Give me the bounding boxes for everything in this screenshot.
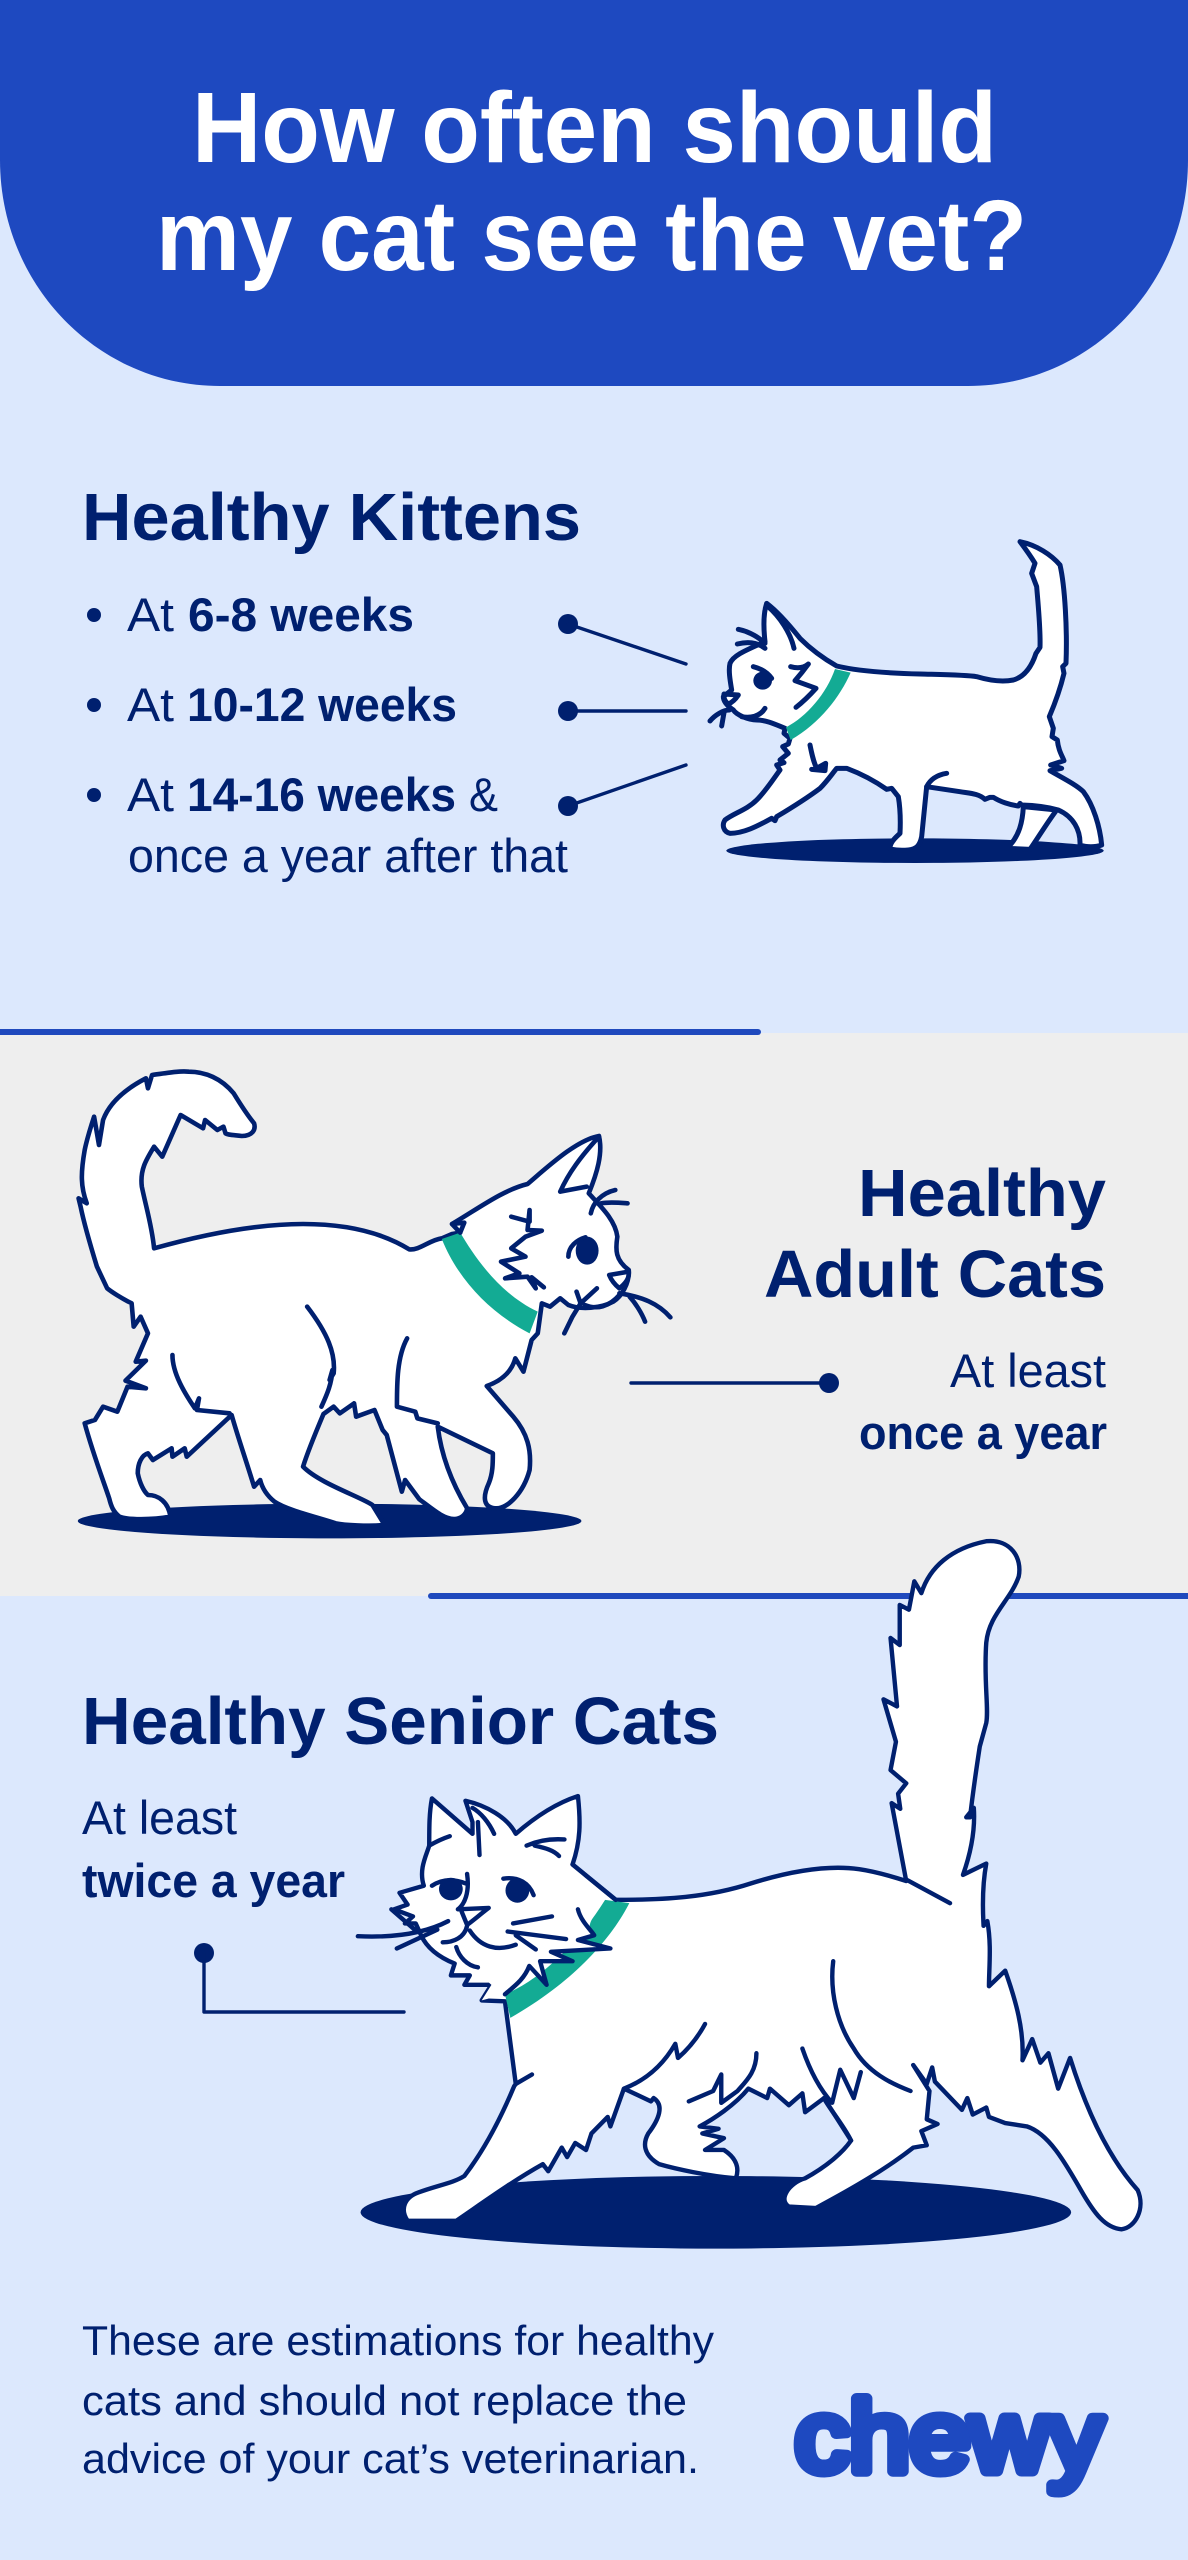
title: [156, 72, 1027, 292]
kittens schedule list: 14-16 weeks: [187, 768, 456, 821]
senior frequency text: twice a year: [82, 1854, 345, 1907]
kittens schedule list: At: [127, 678, 174, 731]
adult frequency text: At least: [950, 1344, 1106, 1397]
disclaimer text: These are estimations for healthy: [82, 2317, 714, 2364]
adult pointer line: [631, 1373, 839, 1393]
kittens schedule list: 10-12 weeks: [187, 678, 457, 731]
kittens schedule list: &: [469, 768, 498, 821]
logo: chewy: chewy: [795, 2381, 1103, 2493]
heading: healthy adult cats: [764, 1156, 1106, 1312]
bottom divider line: [431, 1593, 1188, 1599]
title: How often should: [192, 72, 997, 184]
adult frequency text: once a year: [859, 1406, 1107, 1459]
kittens schedule list: once a year after that: [128, 829, 568, 882]
kittens schedule list: At: [127, 768, 174, 821]
heading: healthy kittens: Healthy Kittens: [82, 480, 581, 555]
illustration: senior cat: [358, 1541, 1140, 2249]
adult frequency text: [859, 1344, 1107, 1459]
heading: healthy senior cats: Healthy Senior Cats: [82, 1684, 719, 1759]
title: my cat see the vet?: [156, 180, 1027, 292]
disclaimer text: cats and should not replace the: [82, 2377, 687, 2424]
senior pointer line: [194, 1943, 404, 2012]
kittens schedule list: [87, 588, 568, 882]
senior frequency text: At least: [82, 1791, 237, 1844]
kittens schedule list: 6-8 weeks: [188, 588, 414, 641]
senior frequency text: [82, 1791, 345, 1907]
kitten pointer lines: [558, 614, 686, 816]
panel: adult cats grey band: [0, 1033, 1188, 1596]
illustration: kitten: [710, 542, 1104, 863]
heading: healthy adult cats: Adult Cats: [764, 1237, 1106, 1312]
illustration: adult cat: [78, 1071, 670, 1538]
kittens schedule list: At: [127, 588, 174, 641]
disclaimer text: [82, 2317, 714, 2482]
heading: healthy adult cats: Healthy: [858, 1156, 1106, 1231]
disclaimer text: advice of your cat’s veterinarian.: [82, 2435, 699, 2482]
header banner: [0, 0, 1188, 386]
top divider line: [0, 1029, 758, 1035]
